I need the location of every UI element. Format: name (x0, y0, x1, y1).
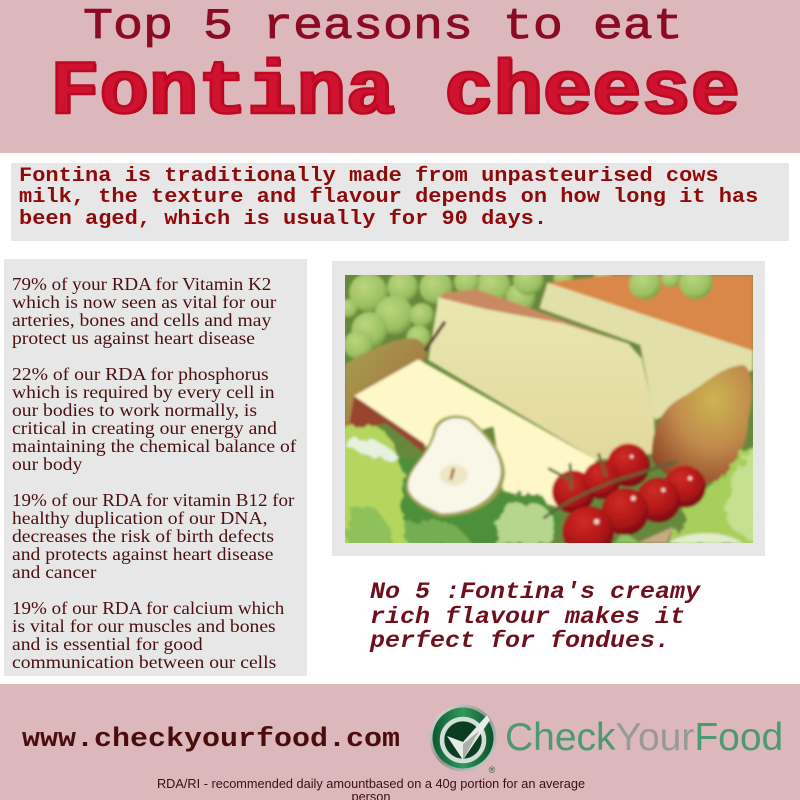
tomatoes (552, 470, 595, 513)
callout: No 5: No 5 :Fontina's creamy (370, 579, 700, 605)
panel: nutrient benefits: arteries, bones and cells and may (12, 310, 271, 330)
intro panel: Fontina is traditionally made from unpasteurised cows (19, 165, 719, 188)
panel: nutrient benefits: our bodies to work normally, is (12, 400, 257, 420)
intro panel: milk, the texture and flavour depends on how long it has (19, 186, 758, 209)
title line: Fontina cheese: Fontina cheese (50, 50, 740, 136)
photo: fontina cheese with pears, grapes, tomatoes and lettuce (345, 275, 753, 543)
website url: www.checkyourfood.com (22, 725, 400, 755)
panel: nutrient benefits: which is required by every cell in (12, 382, 275, 402)
intro panel: been aged, which is usually for 90 days. (19, 208, 547, 231)
intro panel (11, 163, 789, 241)
panel: nutrient benefits: 19% of our RDA for calcium which (12, 598, 284, 618)
panel: nutrient benefits: 79% of your RDA for Vitamin K2 (12, 274, 271, 294)
orange board (547, 275, 753, 351)
panel: nutrient benefits (4, 259, 307, 676)
callout: No 5: rich flavour makes it (370, 604, 685, 630)
callout: No 5 (370, 579, 701, 654)
panel: nutrient benefits: and cancer (12, 562, 96, 582)
panel: nutrient benefits: and protects against heart disease (12, 544, 273, 564)
cut pear half (406, 415, 505, 517)
panel: nutrient benefits: is vital for our muscles and bones (12, 616, 276, 636)
front cheese wedge (354, 359, 597, 507)
grapes (339, 265, 613, 360)
rear cheese wedge (539, 283, 753, 420)
right pear (652, 365, 752, 483)
panel: nutrient benefits: critical in creating our energy and (12, 418, 277, 438)
panel: nutrient benefits: maintaining the chemical balance of (12, 436, 296, 456)
footer band (0, 684, 800, 800)
lettuce (340, 424, 757, 547)
panel: nutrient benefits: our body (12, 454, 82, 474)
middle cheese wedge (428, 291, 655, 460)
photo frame (332, 261, 765, 556)
panel: nutrient benefits: 22% of our RDA for phosphorus (12, 364, 269, 384)
tomato vine (543, 453, 677, 518)
panel: nutrient benefits: communication between our cells (12, 652, 276, 672)
header band (0, 0, 800, 153)
logo wordmark: CheckYourFood (505, 716, 783, 759)
panel: nutrient benefits: 19% of our RDA for vitamin B12 for (12, 490, 294, 510)
panel: nutrient benefits: healthy duplication of our DNA, (12, 508, 268, 528)
panel: nutrient benefits: protect us against heart disease (12, 328, 255, 348)
panel: nutrient benefits: which is now seen as vital for our (12, 292, 276, 312)
rear-left pear (345, 338, 427, 432)
panel: nutrient benefits: and is essential for good (12, 634, 203, 654)
callout: No 5: perfect for fondues. (370, 628, 670, 654)
icon: CheckYourFood logo: ® (489, 765, 496, 775)
icon: CheckYourFood logo (430, 704, 496, 775)
panel: nutrient benefits: decreases the risk of birth defects (12, 526, 274, 546)
title line: Top 5 reasons to eat: Top 5 reasons to eat (83, 2, 683, 52)
